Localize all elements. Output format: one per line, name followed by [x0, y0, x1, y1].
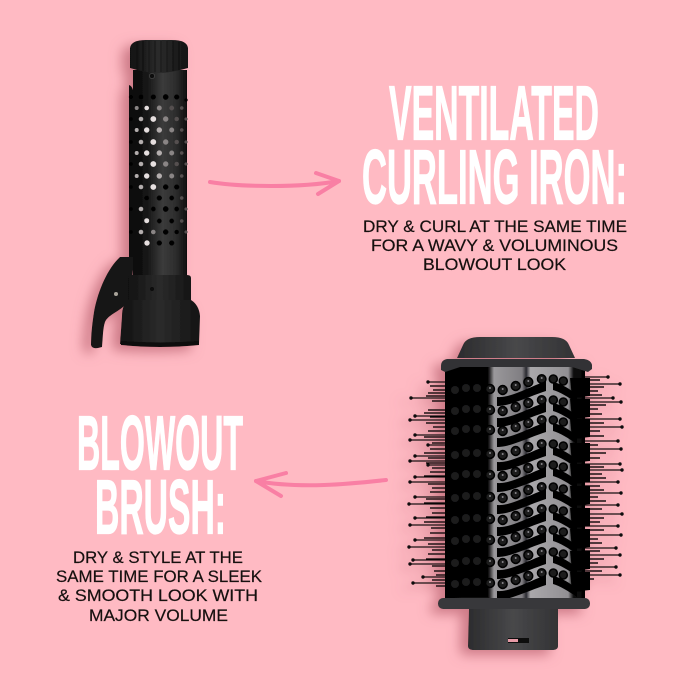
infographic canvas: BLOWOUT [77, 400, 243, 486]
text block: blowout brush description: & SMOOTH LOOK WITH [58, 587, 258, 605]
heading: ventilated curling iron [362, 70, 627, 220]
brush bristle base left [445, 367, 488, 597]
brush neck [468, 609, 558, 650]
text block: blowout brush description: SAME TIME FOR A SLEEK [56, 568, 262, 586]
curling iron clamp [91, 257, 133, 348]
product: ventilated curling iron [91, 40, 200, 348]
text block: blowout brush description [56, 549, 262, 625]
curling iron barrel [133, 70, 187, 277]
arrow: curling iron pointer [210, 173, 339, 194]
curling iron cap [130, 40, 188, 73]
arrow: blowout brush pointer [256, 473, 386, 496]
brush neck slot [508, 638, 529, 643]
brush top cap [457, 337, 575, 358]
curling iron collar pin [150, 287, 154, 291]
text block: curling iron description: DRY & CURL AT THE SAME TIME [363, 218, 627, 236]
text block: blowout brush description: DRY & STYLE AT THE [73, 549, 243, 567]
brush bristle rows [451, 375, 590, 600]
curling iron collar [128, 275, 191, 300]
curling iron side clip strip [129, 85, 134, 258]
text block: curling iron description: FOR A WAVY & VOLUMINOUS [371, 237, 618, 255]
text block: curling iron description [363, 218, 627, 274]
cap ribs [137, 41, 179, 72]
text block: blowout brush description: MAJOR VOLUME [89, 607, 228, 625]
text block: curling iron description: BLOWOUT LOOK [423, 256, 566, 274]
curling iron base [120, 300, 200, 346]
brush barrel [445, 367, 585, 599]
heading: blowout brush [77, 400, 243, 550]
brush left bristles [407, 380, 450, 586]
brush right bristles [580, 375, 624, 579]
infographic canvas: BRUSH: [95, 464, 226, 550]
clamp rivet [114, 292, 118, 296]
product: blowout brush [407, 337, 624, 650]
brush top flange [441, 359, 592, 372]
curling iron ventilation holes [129, 94, 188, 245]
curling iron screw [149, 73, 155, 79]
brush bottom flange [438, 598, 590, 609]
